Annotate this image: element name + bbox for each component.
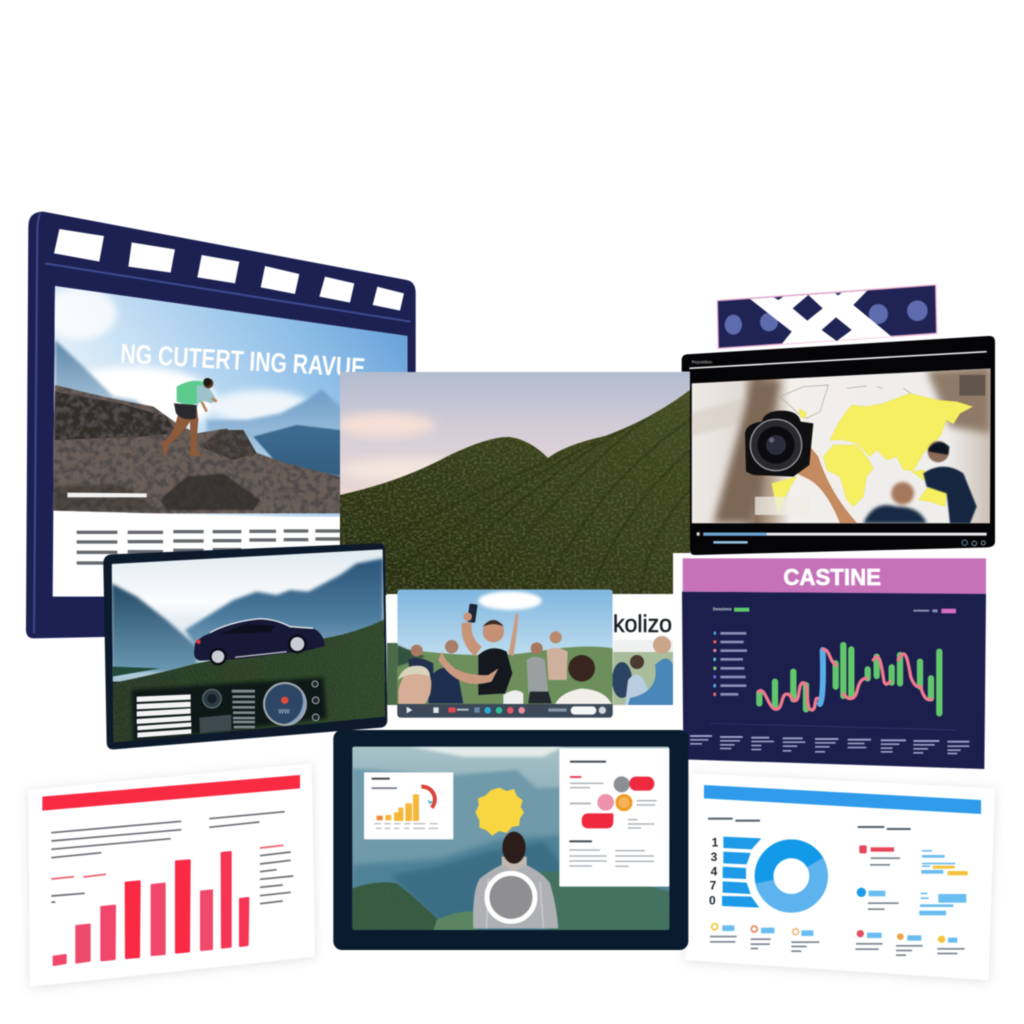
lower left badges	[710, 924, 819, 952]
dashboard stripes	[137, 694, 191, 738]
mountain landscape	[350, 745, 672, 932]
progress bar	[697, 532, 987, 546]
footer text columns	[690, 735, 969, 754]
hill sky	[339, 371, 690, 496]
panel: Castine chart card	[674, 555, 991, 772]
panel: red bar chart card	[28, 763, 315, 987]
text line columns	[77, 529, 340, 565]
group photo scene	[397, 589, 613, 718]
blue card section labels	[708, 818, 911, 830]
card title: CASTINE	[783, 564, 881, 590]
video overlay box	[959, 375, 985, 396]
shirt ring	[487, 873, 535, 921]
caption bar	[67, 493, 147, 497]
mountain climber photo	[43, 283, 410, 517]
video scene	[690, 367, 993, 527]
player title: Reposition	[692, 359, 713, 364]
red accent lines	[51, 845, 283, 879]
blue banner	[704, 785, 981, 814]
hiker figure	[162, 378, 217, 457]
hill slope	[340, 390, 690, 595]
rank numbers: 0	[709, 893, 716, 907]
banner circles	[725, 300, 928, 335]
right info card	[559, 748, 669, 887]
banner diamonds	[774, 293, 852, 341]
film sprocket holes	[54, 229, 404, 311]
small gauge	[203, 689, 221, 708]
banner body	[717, 285, 937, 348]
left photo strip	[387, 643, 401, 705]
right photo strip	[612, 636, 673, 705]
panel: camera video player	[682, 336, 995, 555]
chart legend	[713, 632, 747, 696]
readout lines	[232, 690, 255, 728]
person right	[923, 441, 977, 523]
panel: center tablet with analyst	[333, 730, 688, 950]
film frame body	[26, 212, 416, 638]
video control bar	[397, 704, 613, 718]
player body	[682, 336, 995, 555]
left mini dashboard card	[364, 772, 453, 839]
dark body	[682, 592, 986, 769]
pink header	[683, 558, 986, 594]
chart subtitle	[713, 607, 956, 613]
film white card	[53, 286, 407, 597]
panel: white card behind group photo	[387, 553, 693, 728]
video caption box	[754, 496, 787, 516]
speed dial	[263, 682, 307, 726]
wave and bar chart	[758, 645, 939, 713]
rank numbers	[709, 835, 719, 907]
rank numbers: 4	[711, 865, 718, 879]
car	[194, 619, 325, 665]
funnel bars	[722, 837, 761, 908]
info box	[199, 715, 231, 733]
rank numbers: 3	[711, 850, 718, 864]
speed dial: WW	[278, 709, 290, 715]
photo headline: NG CUTERT ING RAVUE	[120, 338, 366, 383]
tablet body	[103, 543, 387, 749]
arm holding camera	[792, 447, 857, 523]
rank numbers: 1	[712, 835, 719, 849]
chart subtitle: Sessions	[713, 607, 732, 612]
panel: blue donut card	[685, 773, 995, 980]
camera	[745, 411, 813, 477]
yellow sun badge	[475, 788, 524, 836]
red card body	[28, 763, 315, 987]
donut chart	[764, 849, 819, 903]
blue card body	[685, 773, 995, 980]
panel: car tablet	[103, 543, 387, 749]
banner: film X graphic	[717, 285, 937, 348]
film frame edge highlight	[34, 213, 40, 633]
panel: film strip frame	[26, 212, 416, 638]
brand word: kolizo	[613, 611, 672, 638]
red card text lines	[51, 812, 293, 904]
film divider line	[45, 263, 411, 322]
hill crop rows	[380, 414, 690, 589]
dashboard buttons	[312, 681, 319, 721]
panel: group selfie photo	[397, 589, 613, 718]
analyst from behind	[473, 832, 558, 928]
red banner	[42, 775, 300, 811]
banner white cross	[750, 291, 892, 344]
lower right badges	[855, 930, 965, 956]
world map	[772, 393, 973, 515]
panel: green hill photo	[335, 372, 690, 595]
faint outline map	[780, 385, 913, 418]
center tablet body	[333, 730, 688, 950]
car landscape scene	[110, 548, 387, 743]
chart baseline	[710, 723, 957, 730]
rank numbers: 7	[710, 879, 717, 893]
card backing	[674, 555, 991, 772]
player top line	[689, 352, 987, 368]
upper right items	[857, 845, 968, 915]
red bars	[54, 852, 248, 965]
person lower	[863, 482, 927, 523]
